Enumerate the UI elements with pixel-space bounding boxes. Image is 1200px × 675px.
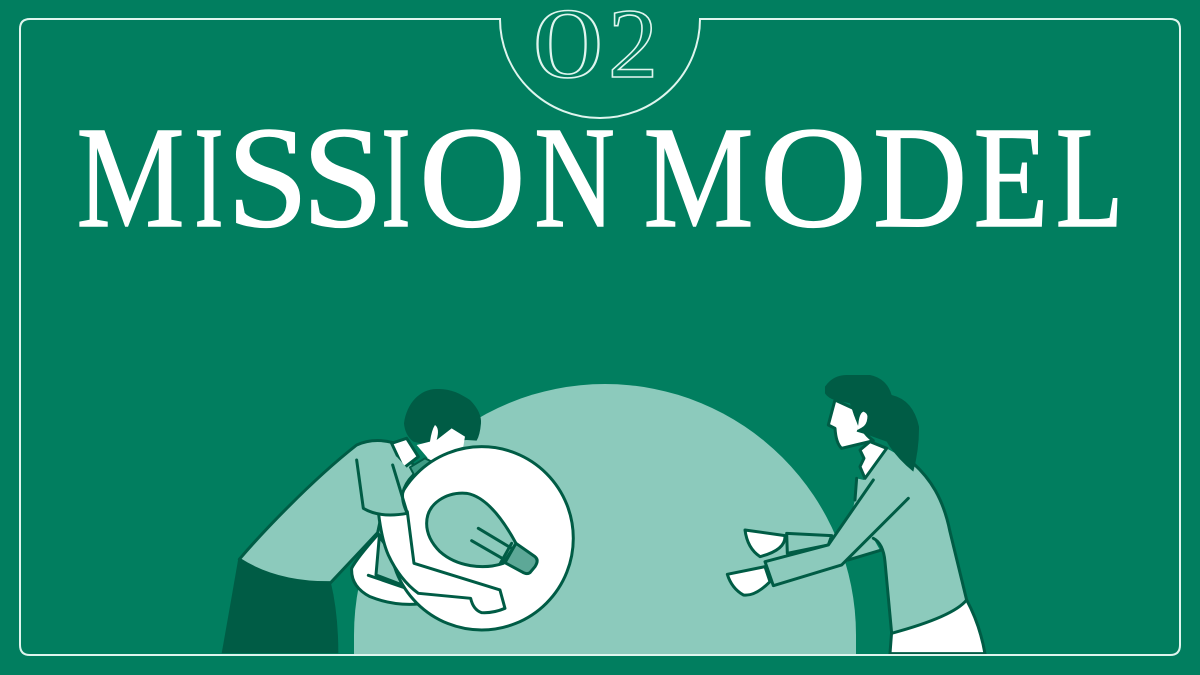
title: L xyxy=(1056,98,1124,258)
title: S xyxy=(302,98,384,258)
neck and collar xyxy=(860,442,887,478)
upper hand xyxy=(745,530,785,557)
ear xyxy=(857,412,867,430)
jacket fill xyxy=(765,448,967,633)
white disc xyxy=(390,447,573,630)
jacket and front arm xyxy=(765,448,967,633)
front arm and hand xyxy=(378,512,505,613)
jacket outlines xyxy=(765,463,967,633)
hair xyxy=(404,389,481,444)
hair and ponytail xyxy=(825,375,919,472)
illustration: woman pushing with hands xyxy=(727,375,985,654)
face and neck xyxy=(417,425,465,461)
torso under arm xyxy=(376,537,405,586)
title: O xyxy=(419,98,526,258)
sleeve fill xyxy=(358,457,413,515)
title: D xyxy=(873,98,967,258)
light bulb xyxy=(427,493,537,574)
title: I xyxy=(194,98,223,258)
title: E xyxy=(974,98,1048,258)
title: N xyxy=(534,98,615,258)
sleeve outline xyxy=(357,460,413,515)
illustration: man holding light bulb disc xyxy=(222,389,573,653)
title: M xyxy=(644,98,754,258)
sleeve xyxy=(357,457,413,515)
white skirt xyxy=(890,600,985,654)
bulb base xyxy=(505,543,537,574)
back arm xyxy=(352,534,423,604)
title: O xyxy=(760,98,867,258)
title: M xyxy=(76,98,184,258)
large light circle xyxy=(354,384,856,654)
title: I xyxy=(381,98,410,258)
tie xyxy=(410,458,432,477)
forearm line xyxy=(368,575,413,591)
bulb glass xyxy=(427,493,516,567)
face xyxy=(828,400,873,448)
back and shirt xyxy=(239,440,418,583)
shirt collar xyxy=(392,438,418,468)
lower hand xyxy=(727,567,770,595)
back sleeve xyxy=(787,533,832,553)
title: S xyxy=(227,98,308,258)
bulb filament xyxy=(472,528,512,564)
trousers xyxy=(222,558,338,653)
